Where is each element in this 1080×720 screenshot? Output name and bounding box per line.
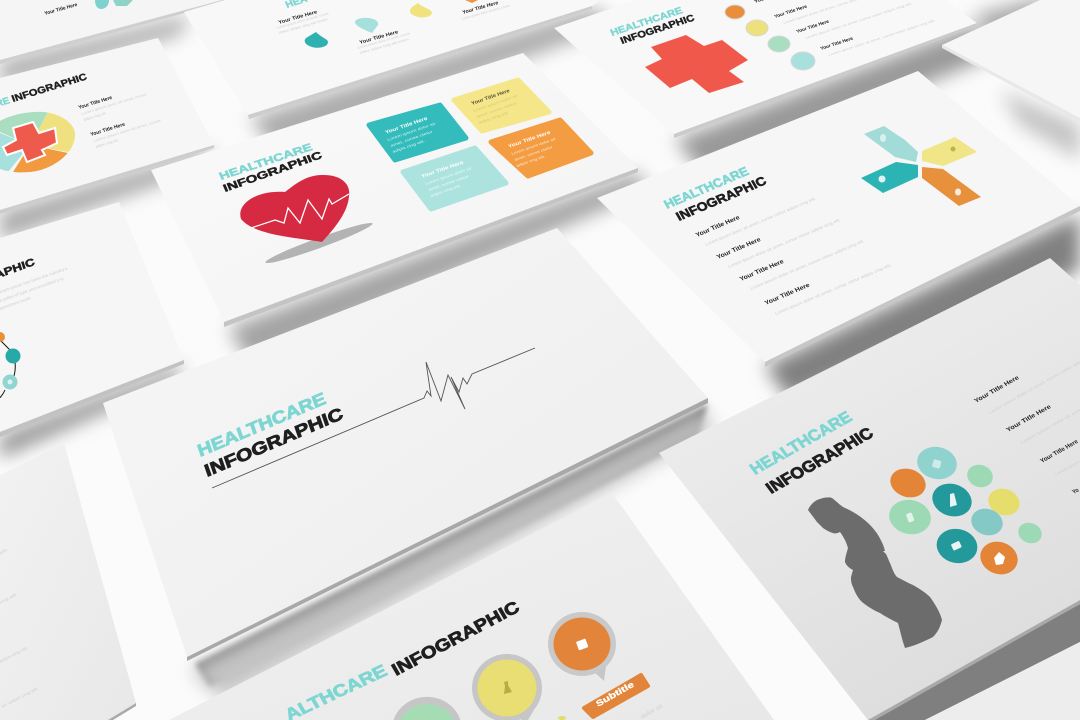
card: teal: adipis cing elit. [392, 139, 426, 154]
icon: heart with pulse [240, 175, 349, 242]
title [0, 72, 89, 110]
title [282, 597, 523, 720]
slide: top centre drops [184, 0, 600, 119]
bubble: green [394, 697, 460, 720]
arrow icons [878, 134, 961, 196]
lorem text fragments [0, 546, 39, 709]
slide: left middle [0, 202, 184, 437]
card: orange: adipis cing elit. [516, 154, 546, 168]
text items: Your Title Here [1005, 403, 1053, 434]
text items: Your Title Here [773, 4, 808, 19]
card: orange: Lorem ipsum dolor sit [511, 137, 556, 156]
card: orange [491, 120, 591, 176]
card: pale teal: Lorem ipsum dolor sit [425, 166, 472, 186]
text items: Lorem ipsum dolor sit amet, conse ctetur adipis cing elit. [774, 262, 892, 316]
circles cluster [886, 443, 1045, 580]
slide: main title pulse [103, 228, 708, 661]
title [217, 141, 325, 195]
icon: light drop [355, 18, 378, 33]
text items: Lorem ipsum dolor sit amet, conse [81, 92, 147, 116]
card: yellow: Lorem ipsum dolor sit [473, 94, 518, 113]
text items: Lorem ipsum dolor sit amet, conse ctetur adipis cing elit. [704, 196, 817, 247]
text items: Your Title Here [278, 9, 318, 26]
slide: top left partial [0, 0, 232, 64]
text items: adipis cing elit. [83, 111, 107, 122]
title: HEALTHCARE [195, 389, 328, 461]
text items [695, 196, 892, 316]
text items [973, 357, 1080, 496]
text items: Lorem ipsum dolor sit amet, conse ctetur adipis cing elit. [727, 217, 842, 269]
lorem text: a galley of type and scrambled it to [0, 276, 65, 303]
card: yellow: adipis cing elit. [478, 111, 510, 125]
title: HEALTHCARE [747, 408, 856, 478]
icon: teal drop [305, 32, 328, 48]
text items: Your Title Here [716, 236, 763, 261]
text items: Lorem ipsum dolor sit amet, conse ctetur adipis cing elit. [805, 1, 913, 40]
bubble: orange [548, 612, 616, 681]
icon: yellow dot [558, 716, 566, 720]
title [747, 408, 877, 497]
text items: Lorem ipsum dolor sit amet, conse ctetur adipis [988, 357, 1080, 415]
icons: top-left teal shapes [95, 0, 133, 9]
text items: Lorem ipsum dolor sit amet, conse [276, 12, 329, 30]
text items: Your Title Here [90, 122, 126, 138]
circles list [725, 5, 815, 70]
card: pale teal [403, 148, 506, 209]
heart shadow [264, 219, 374, 267]
text items: Your Title Here [359, 29, 399, 46]
text items [78, 92, 161, 149]
card: orange: amet, conse ctetur [514, 145, 554, 162]
card: orange: Your Title Here [507, 130, 552, 150]
text items: Your Title Here [739, 258, 786, 283]
title: HEALTHCARE [217, 141, 314, 183]
text: top-left title: Your Title Here [44, 2, 78, 17]
lorem text fragments: tur adipis cing elit. [1, 685, 39, 709]
title: INFOGRAPHIC [389, 597, 523, 679]
arrow: orange [922, 167, 981, 206]
text items: Lorem ipsum dolor sit amet, conse [357, 32, 410, 50]
title: HEALTHCARE [662, 164, 751, 212]
title [662, 164, 769, 224]
title: INFOGRAPHIC [10, 72, 89, 105]
text items: Lorem ipsum dolor sit amet, conse [93, 119, 161, 143]
silhouette [808, 497, 942, 648]
circle icons [906, 459, 1005, 565]
title [195, 389, 345, 481]
title: INFOGRAPHIC [619, 13, 697, 47]
arrow: yellow [922, 137, 977, 166]
icon: yellow drop [410, 3, 432, 17]
text items: Your Title Here [695, 214, 742, 239]
text items: Your Title Here [1039, 438, 1080, 465]
lorem text [0, 266, 68, 311]
slide: pentagon arrows [597, 71, 1080, 367]
card: teal: Lorem ipsum dolor sit [387, 122, 436, 142]
card: teal: Your Title Here [384, 116, 429, 136]
slide: top right blank [942, 0, 1080, 122]
text items: adipis cing elit. [95, 138, 119, 149]
text items: Your Title Here [462, 0, 499, 16]
title: INFOGRAPHIC [674, 174, 769, 224]
text items: Lorem ipsum [1054, 459, 1080, 477]
pie chart with red cross [0, 112, 76, 172]
subtitle tag [584, 675, 648, 717]
text items: Lorem ipsum dolor sit amet, conse ctetur adipis cing elit. [749, 238, 866, 291]
slide: pie with cross [0, 38, 214, 214]
text items: Your Title Here [764, 282, 812, 307]
title: HEALTHCARE [609, 5, 684, 39]
slide: pregnancy [659, 258, 1080, 720]
icon: orange drop [465, 0, 478, 3]
network diagram [0, 332, 20, 398]
text items: Lorem ipsum dolor sit amet, conse [1020, 396, 1080, 445]
title: INFOGRAPHIC [221, 149, 325, 195]
card: yellow: Your Title Here [470, 88, 511, 107]
text items [276, 0, 510, 55]
card: pale teal: Your Title Here [420, 160, 465, 180]
slide: heart [151, 53, 638, 327]
title [609, 5, 697, 47]
text items: Your Title Here [795, 19, 830, 34]
title: INFOGRAPHIC [763, 424, 877, 497]
card: pale teal: adipis cing elit. [430, 184, 462, 198]
arrow: teal [861, 162, 918, 193]
card: yellow [454, 80, 549, 131]
text items: ctetur adipis cing elit lorem. [359, 37, 410, 55]
pulse line [212, 348, 535, 488]
title: INFOGRAPHIC [202, 404, 345, 481]
slide: speech bubbles [169, 493, 774, 720]
card: yellow: amet, conse ctetur [476, 101, 518, 119]
text items [753, 0, 936, 57]
text items: ctetur adipis cing elit lorem. [278, 17, 329, 35]
bubble: yellow [472, 654, 542, 720]
text items: Lorem ipsum dolor sit amet, conse ctetur adipis cing elit. [828, 18, 936, 57]
subtitle tag: Subtitle [594, 679, 636, 709]
slide: left lower [0, 443, 136, 720]
text items: Lorem ipsum dolor sit amet, conse [461, 4, 510, 21]
text items: Your Title Here [78, 95, 113, 111]
text items: Your Title Here [819, 36, 854, 51]
slide: red cross [554, 0, 977, 138]
icon: red cross [645, 35, 748, 93]
card: pale teal: amet, conse ctetur [428, 174, 470, 192]
card: teal: amet, conse ctetur [390, 129, 434, 148]
arrow: pale teal [864, 126, 918, 162]
card: teal [369, 105, 466, 160]
text items: Your Title Here [973, 374, 1021, 405]
